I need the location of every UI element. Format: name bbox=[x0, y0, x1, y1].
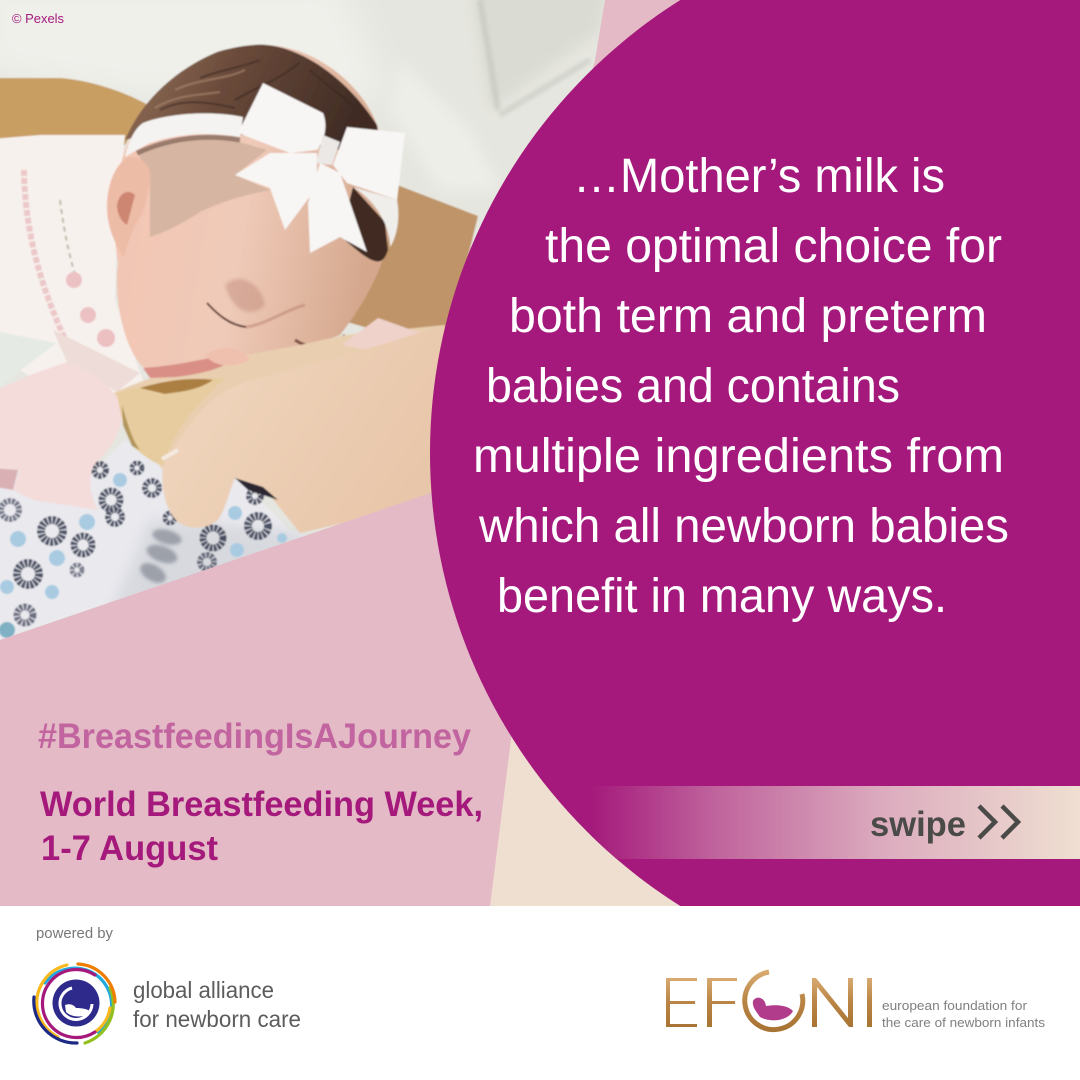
logo: EFCNI bbox=[666, 972, 1046, 1030]
logo text: global alliance bbox=[133, 977, 274, 1003]
event title: World Breastfeeding Week, bbox=[40, 785, 483, 824]
hand bbox=[162, 325, 445, 533]
event title bbox=[40, 785, 483, 868]
skin/face bbox=[114, 45, 390, 378]
quote text: which all newborn babies bbox=[478, 500, 1009, 553]
quote text: both term and preterm bbox=[509, 290, 987, 343]
panel: cream wedge bbox=[490, 700, 720, 906]
quote text: benefit in many ways. bbox=[497, 570, 947, 623]
icon: baby shape bbox=[753, 998, 793, 1020]
logo text: european foundation for bbox=[882, 998, 1028, 1013]
bow bbox=[125, 113, 243, 157]
letters E F bbox=[666, 978, 737, 1027]
fabric bbox=[0, 440, 304, 640]
quote text bbox=[473, 150, 1009, 623]
icon: chevrons bbox=[979, 806, 1018, 838]
blanket bbox=[0, 362, 122, 510]
powered by: powered by bbox=[36, 925, 113, 942]
logo: global alliance for newborn care bbox=[34, 964, 301, 1043]
icon: rings bbox=[34, 964, 115, 1043]
quote text: babies and contains bbox=[486, 360, 900, 413]
credit: Pexels: © Pexels bbox=[12, 11, 64, 26]
event title: 1-7 August bbox=[41, 829, 218, 868]
quote text: multiple ingredients from bbox=[473, 430, 1004, 483]
swipe label: swipe bbox=[870, 805, 966, 844]
hair bbox=[125, 45, 380, 150]
logo text bbox=[133, 977, 301, 1032]
letters N I bbox=[812, 978, 872, 1027]
letter C bbox=[745, 972, 803, 1030]
quote text: the optimal choice for bbox=[545, 220, 1002, 273]
icon: baby in circle bbox=[52, 980, 100, 1026]
panel: purple circle bbox=[430, 0, 1080, 988]
breast bbox=[117, 378, 225, 465]
logo text bbox=[882, 998, 1046, 1030]
hashtag: #BreastfeedingIsAJourney bbox=[38, 717, 472, 756]
swipe bar bbox=[590, 786, 1080, 859]
logo text: for newborn care bbox=[133, 1006, 301, 1032]
photo: baby breastfeeding bbox=[0, 0, 605, 640]
footer bbox=[0, 906, 1080, 1080]
ear bbox=[107, 157, 150, 257]
breast and hand under face bbox=[110, 325, 445, 480]
logo text: the care of newborn infants bbox=[882, 1015, 1046, 1030]
quote text: …Mother’s milk is bbox=[573, 150, 945, 203]
